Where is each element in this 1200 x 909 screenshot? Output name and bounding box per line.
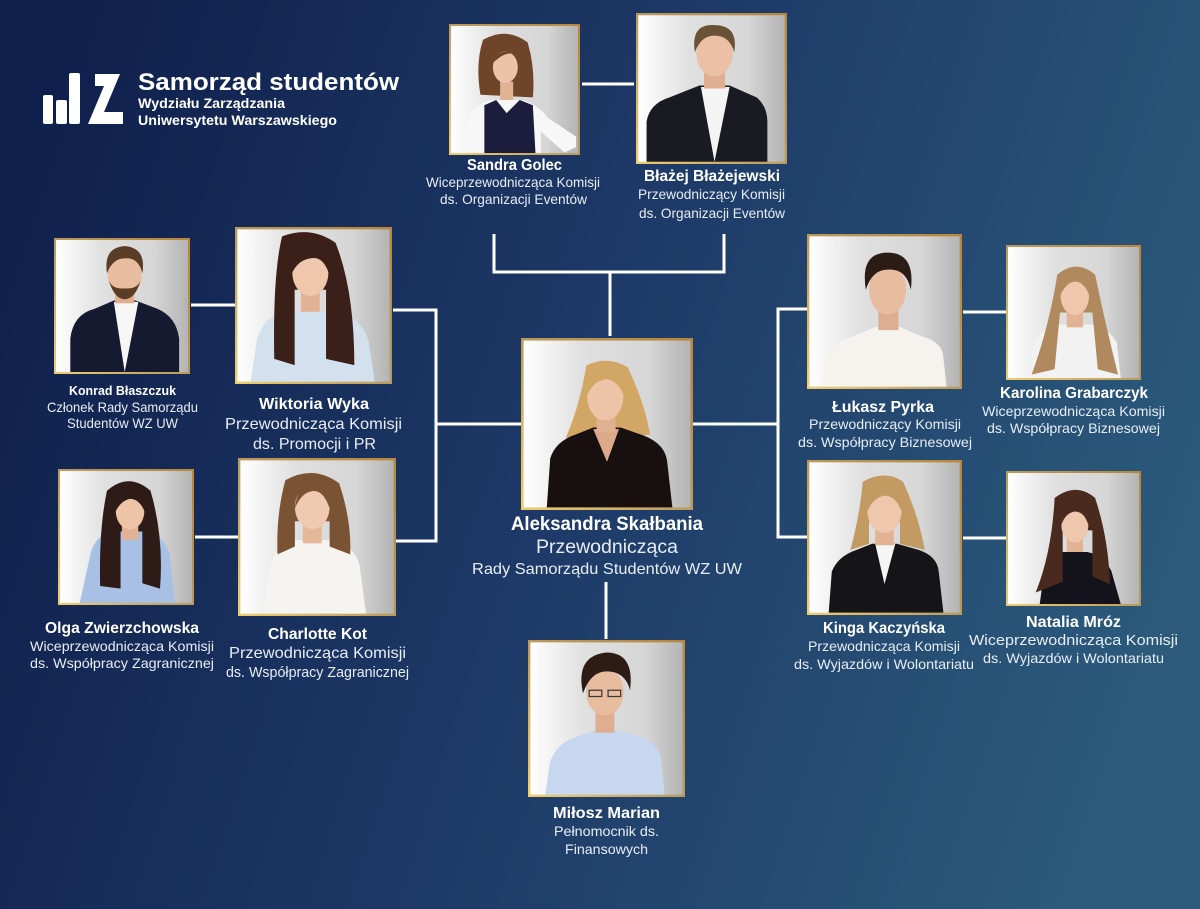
logo text: Wydziału Zarządzania — [138, 95, 285, 111]
panel: Aleksandra Skałbania — [472, 338, 743, 578]
text: Kinga Kaczyńska: ds. Wyjazdów i Wolontariatu — [794, 656, 974, 672]
panel: Wiktoria Wyka — [225, 227, 402, 453]
panel: Błażej Błażejewski — [636, 13, 787, 221]
text: Kinga Kaczyńska: Kinga Kaczyńska — [823, 620, 945, 637]
panel: Charlotte Kot — [226, 458, 409, 681]
text: Miłosz Marian — [553, 805, 660, 857]
panel: Karolina Grabarczyk — [982, 245, 1165, 436]
text: Karolina Grabarczyk: Wiceprzewodnicząca Komisji — [982, 403, 1165, 419]
text: Błażej Błażejewski — [638, 168, 786, 221]
panel: Sandra Golec — [426, 24, 600, 207]
photo: Łukasz Pyrka — [807, 234, 962, 389]
photo: Wiktoria Wyka — [235, 227, 392, 384]
logo text — [138, 69, 399, 128]
text: Sandra Golec: Wiceprzewodnicząca Komisji — [426, 174, 600, 190]
photo: Natalia Mróz — [1006, 471, 1141, 606]
text: Sandra Golec — [426, 157, 600, 207]
text: Natalia Mróz — [969, 614, 1178, 666]
photo: Karolina Grabarczyk — [1006, 245, 1141, 380]
text: Charlotte Kot: Charlotte Kot — [268, 626, 368, 643]
text: Łukasz Pyrka: Łukasz Pyrka — [832, 399, 934, 416]
text: Wiktoria Wyka: Wiktoria Wyka — [259, 396, 369, 413]
photo: Aleksandra Skałbania — [521, 338, 693, 510]
text: Wiktoria Wyka: Przewodnicząca Komisji — [225, 416, 402, 433]
photo: Konrad Błaszczuk — [54, 238, 190, 374]
connector: Kinga to Natalia — [963, 536, 1006, 540]
text: Aleksandra Skałbania: Przewodnicząca — [536, 537, 678, 558]
panel: Kinga Kaczyńska — [794, 460, 974, 672]
connector: Sandra to Błażej — [582, 82, 634, 86]
text: Sandra Golec: Sandra Golec — [467, 157, 562, 174]
connector: Łukasz to Karolina — [963, 310, 1006, 314]
photo: Sandra Golec — [449, 24, 580, 155]
text: Konrad Błaszczuk: Członek Rady Samorządu — [47, 399, 198, 415]
text: Charlotte Kot: ds. Współpracy Zagranicznej — [226, 664, 409, 681]
text: Karolina Grabarczyk: Karolina Grabarczyk — [1000, 385, 1148, 402]
connector: Olga to Charlotte — [195, 536, 238, 538]
logo text: Uniwersytetu Warszawskiego — [138, 112, 337, 128]
connector: right bracket — [693, 309, 807, 537]
photo: Charlotte Kot — [238, 458, 396, 616]
icon: bars and Z — [43, 73, 123, 124]
text: Karolina Grabarczyk: ds. Współpracy Biznesowej — [987, 420, 1160, 436]
text: Karolina Grabarczyk — [982, 385, 1165, 436]
text: Łukasz Pyrka — [798, 399, 972, 450]
panel: Miłosz Marian — [528, 640, 685, 857]
text: Miłosz Marian: Miłosz Marian — [553, 805, 660, 822]
text: Miłosz Marian: Finansowych — [565, 841, 648, 857]
text: Charlotte Kot — [226, 626, 409, 681]
text: Konrad Błaszczuk — [47, 383, 198, 431]
logo text: Samorząd studentów — [138, 69, 399, 96]
text: Konrad Błaszczuk: Konrad Błaszczuk — [69, 383, 177, 398]
text: Łukasz Pyrka: Przewodniczący Komisji — [809, 416, 961, 432]
text: Charlotte Kot: Przewodnicząca Komisji — [229, 645, 406, 662]
text: Natalia Mróz: ds. Wyjazdów i Wolontariatu — [983, 650, 1164, 666]
text: Aleksandra Skałbania: Rady Samorządu Studentów WZ UW — [472, 561, 743, 578]
text: Olga Zwierzchowska: Wiceprzewodnicząca Komisji — [30, 638, 214, 654]
text: Kinga Kaczyńska: Przewodnicząca Komisji — [808, 638, 960, 654]
panel: Olga Zwierzchowska — [30, 469, 214, 671]
text: Błażej Błażejewski: ds. Organizacji Eventów — [639, 205, 786, 221]
text: Konrad Błaszczuk: Studentów WZ UW — [67, 415, 179, 431]
text: Sandra Golec: ds. Organizacji Eventów — [440, 191, 588, 207]
photo: Miłosz Marian — [528, 640, 685, 797]
text: Olga Zwierzchowska: Olga Zwierzchowska — [45, 620, 199, 637]
panel: Łukasz Pyrka — [798, 234, 972, 450]
connector: Aleksandra to Miłosz — [604, 582, 608, 639]
text: Olga Zwierzchowska: ds. Współpracy Zagranicznej — [30, 655, 214, 671]
text: Olga Zwierzchowska — [30, 620, 214, 671]
text: Aleksandra Skałbania — [472, 514, 743, 578]
text: Błażej Błażejewski: Błażej Błażejewski — [644, 168, 780, 185]
connector: left bracket — [393, 310, 521, 541]
photo: Błażej Błażejewski — [636, 13, 787, 164]
connector: top bracket — [494, 234, 724, 336]
panel: Konrad Błaszczuk — [47, 238, 198, 431]
text: Wiktoria Wyka: ds. Promocji i PR — [253, 436, 376, 453]
text: Miłosz Marian: Pełnomocnik ds. — [554, 823, 659, 839]
connector: Konrad to Wiktoria — [191, 304, 235, 306]
text: Aleksandra Skałbania: Aleksandra Skałbania — [511, 514, 703, 535]
panel: Natalia Mróz — [969, 471, 1178, 666]
text: Kinga Kaczyńska — [794, 620, 974, 672]
text: Błażej Błażejewski: Przewodniczący Komisji — [638, 186, 785, 202]
text: Natalia Mróz: Natalia Mróz — [1026, 614, 1121, 631]
photo: Olga Zwierzchowska — [58, 469, 194, 605]
text: Łukasz Pyrka: ds. Współpracy Biznesowej — [798, 434, 972, 450]
text: Wiktoria Wyka — [225, 396, 402, 453]
logo — [43, 69, 399, 128]
photo: Kinga Kaczyńska — [807, 460, 962, 615]
text: Natalia Mróz: Wiceprzewodnicząca Komisji — [969, 632, 1178, 649]
